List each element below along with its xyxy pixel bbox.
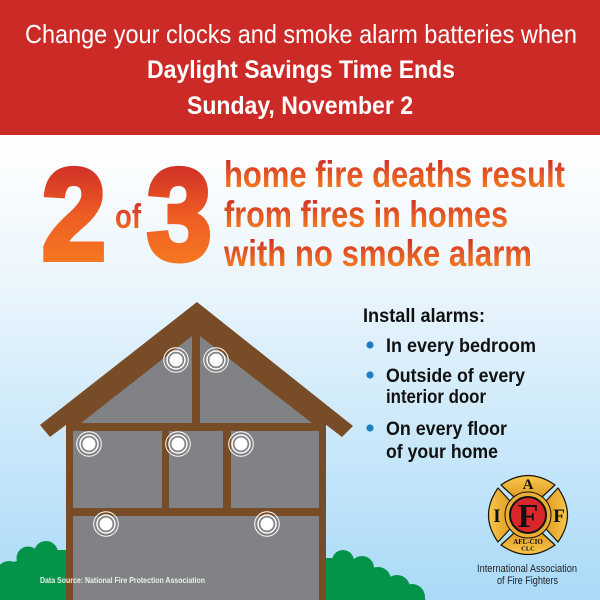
smoke alarms	[77, 348, 279, 536]
attic right room	[200, 336, 312, 423]
organization name	[477, 563, 577, 587]
statistic: 2 of 3	[42, 142, 212, 287]
alarm attic right	[204, 348, 228, 372]
red center	[510, 497, 546, 533]
item 2 line 2: interior door	[386, 387, 487, 408]
left bushes	[0, 541, 70, 600]
upper left room	[73, 431, 162, 508]
upper middle room	[169, 431, 223, 508]
bullet 1	[366, 341, 374, 349]
IAFF logo	[488, 476, 568, 554]
sky background	[0, 135, 600, 600]
data source note: Data Source: National Fire Protection Association	[40, 575, 205, 585]
description line 2: from fires in homes	[224, 194, 508, 235]
name line 2: of Fire Fighters	[497, 575, 558, 587]
upper right room	[231, 431, 319, 508]
alarm attic left	[164, 348, 188, 372]
walls	[66, 420, 326, 600]
item 3 line 2: of your home	[386, 442, 498, 463]
right bushes	[322, 550, 426, 600]
alarm upper middle	[166, 432, 190, 456]
letter F center: F	[518, 498, 538, 535]
letter F right: F	[553, 506, 565, 527]
alarm upper left	[77, 432, 101, 456]
banner line 3: Sunday, November 2	[187, 92, 413, 120]
item 1: In every bedroom	[386, 336, 536, 357]
digit 3: 3	[147, 143, 212, 287]
ground floor room	[73, 516, 319, 600]
cross arms	[488, 476, 568, 554]
header banner	[0, 0, 600, 135]
alarm ground left	[94, 512, 118, 536]
house	[40, 302, 353, 600]
name line 1: International Association	[477, 563, 577, 575]
statistic description	[223, 154, 565, 274]
item 3 line 1: On every floor	[386, 419, 508, 440]
description line 3: with no smoke alarm	[223, 233, 532, 274]
attic left room	[81, 336, 192, 423]
list heading: Install alarms:	[363, 306, 485, 327]
letter A: A	[523, 477, 534, 493]
bullet 3	[366, 424, 374, 432]
word of: of	[115, 198, 142, 236]
letter I: I	[493, 506, 501, 527]
install alarms list	[363, 306, 536, 463]
banner line 2: Daylight Savings Time Ends	[147, 56, 455, 84]
outer gold ring	[505, 492, 551, 538]
alarm upper right	[229, 432, 253, 456]
roof	[40, 302, 353, 437]
AFL-CIO label: AFL-CIO	[513, 538, 543, 546]
roof filler	[62, 320, 330, 424]
banner background	[0, 0, 600, 135]
bullet 2	[366, 371, 374, 379]
CLC label: CLC	[521, 546, 535, 552]
digit 2: 2	[42, 142, 106, 286]
item 2 line 1: Outside of every	[386, 366, 525, 387]
alarm ground right	[255, 512, 279, 536]
